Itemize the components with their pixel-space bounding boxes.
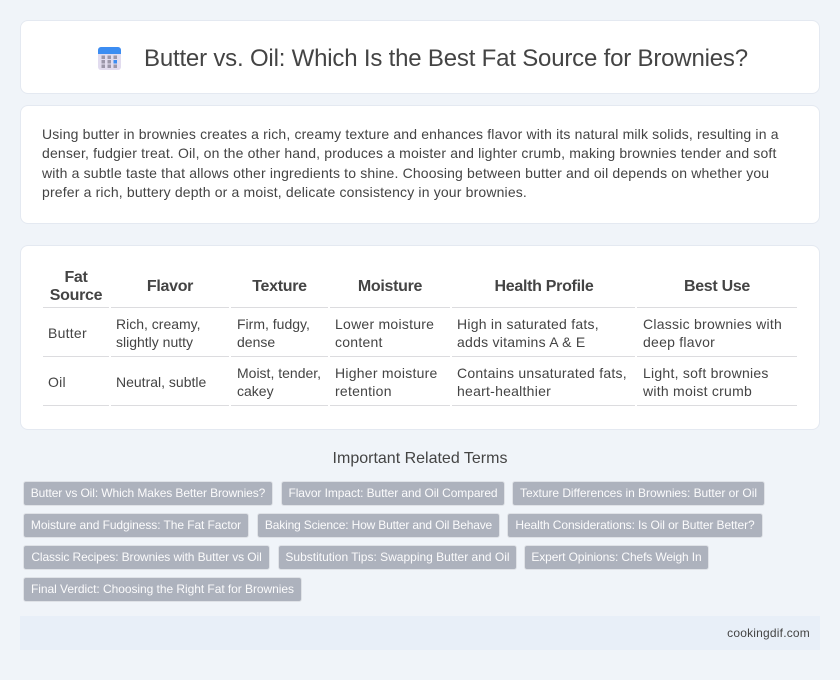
icon: calendar — [98, 47, 121, 70]
row: butter: Classic brownies with — [643, 316, 782, 332]
column headers: Fat — [64, 269, 88, 286]
row: oil: heart-healthier — [457, 383, 551, 399]
row: oil: cakey — [237, 383, 274, 399]
column headers: Texture — [252, 278, 307, 295]
related term tags: Expert Opinions: Chefs Weigh In — [531, 550, 702, 564]
row: oil: Neutral, subtle — [116, 374, 206, 390]
title: Butter vs. Oil: Which Is the Best Fat Source for Brownies? — [144, 45, 748, 72]
intro text: with a subtle taste that allows other ingredients to shine. Choosing between butter and oil depends on whether you — [42, 165, 769, 181]
row: butter: dense — [237, 334, 275, 350]
related term tags: Classic Recipes: Brownies with Butter vs Oil — [31, 550, 262, 564]
row: oil: Higher moisture — [335, 365, 438, 381]
row: oil: Moist, tender, — [237, 365, 321, 381]
related term tags: Final Verdict: Choosing the Right Fat for Brownies — [31, 582, 294, 596]
footer credit: cookingdif.com — [727, 626, 810, 640]
row: butter: High in saturated fats, — [457, 316, 599, 332]
intro text: Using butter in brownies creates a rich, creamy texture and enhances flavor with its natural milk solids, resulting in a — [42, 126, 779, 142]
row: oil: with moist crumb — [643, 383, 752, 399]
related term tags: Butter vs Oil: Which Makes Better Brownies? — [31, 486, 265, 500]
row: oil: Contains unsaturated fats, — [457, 365, 627, 381]
related term tags: Texture Differences in Brownies: Butter or Oil — [520, 486, 757, 500]
row: butter: deep flavor — [643, 334, 715, 350]
header panel — [20, 20, 820, 94]
row: butter: Lower moisture — [335, 316, 434, 332]
column headers: Flavor — [147, 278, 193, 295]
column headers — [50, 269, 750, 304]
column headers: Source — [50, 287, 102, 304]
row: oil: Light, soft brownies — [643, 365, 769, 381]
row: butter: Firm, fudgy, — [237, 316, 310, 332]
comparison table panel — [20, 245, 820, 430]
footer bar — [20, 616, 820, 650]
row: butter: Rich, creamy, — [116, 316, 201, 332]
related term tags: Baking Science: How Butter and Oil Behave — [265, 518, 492, 532]
row: butter: Butter — [48, 325, 87, 341]
row: oil: retention — [335, 383, 392, 399]
row: butter: slightly nutty — [116, 334, 193, 350]
row: butter: adds vitamins A & E — [457, 334, 585, 350]
column headers: Health Profile — [495, 278, 593, 295]
related term tags: Health Considerations: Is Oil or Butter Better? — [515, 518, 755, 532]
comparison table — [43, 269, 797, 406]
column headers: Best Use — [684, 278, 750, 295]
intro text: prefer a rich, buttery depth or a moist, delicate consistency in your brownies. — [42, 184, 527, 200]
related term tags — [23, 481, 765, 602]
row: oil: Oil — [48, 374, 66, 390]
related terms heading: Important Related Terms — [333, 450, 507, 467]
intro text: denser, fudgier treat. Oil, on the other hand, produces a moister and lighter crumb, making brownies tender and soft — [42, 145, 777, 161]
intro panel — [20, 105, 820, 224]
related term tags: Substitution Tips: Swapping Butter and Oil — [285, 550, 510, 564]
intro text — [42, 126, 779, 200]
related term tags: Flavor Impact: Butter and Oil Compared — [288, 486, 498, 500]
column headers: Moisture — [358, 278, 422, 295]
row: oil — [48, 365, 769, 399]
row: butter — [48, 316, 782, 350]
row: butter: content — [335, 334, 383, 350]
related term tags: Moisture and Fudginess: The Fat Factor — [31, 518, 241, 532]
